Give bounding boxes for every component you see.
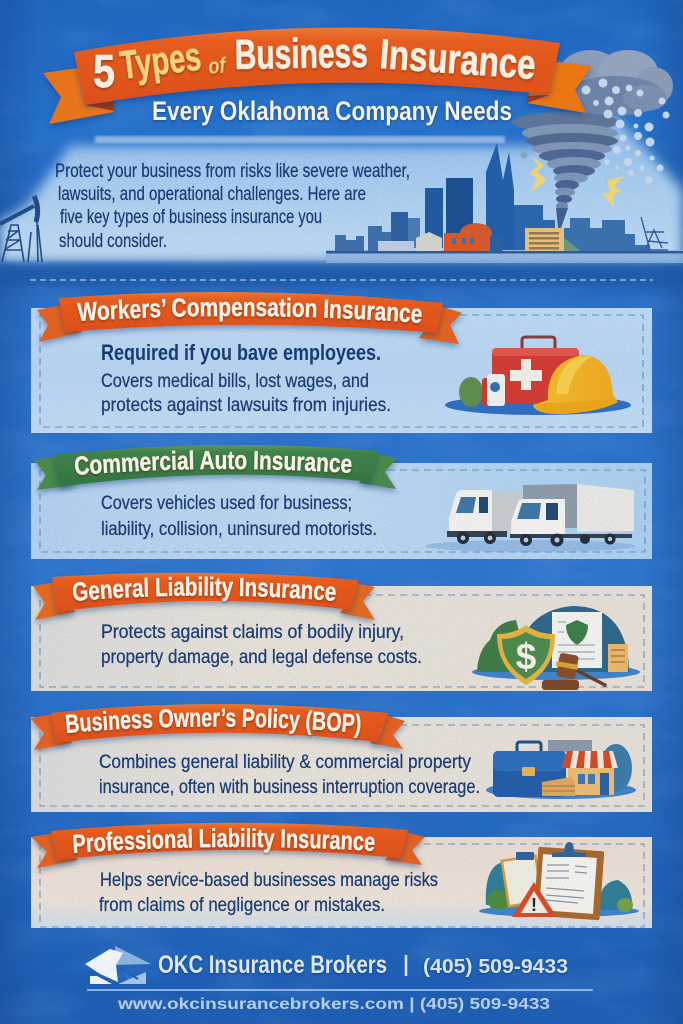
ribbon: commercial auto xyxy=(32,444,398,496)
panel: commercial auto xyxy=(31,444,652,559)
body text: Protects against claims of bodily injury, xyxy=(101,622,404,643)
main title: of xyxy=(207,52,229,79)
panel: intro with skyline xyxy=(0,110,683,285)
body text: insurance, often with business interruption coverage. xyxy=(99,777,480,798)
icon: shield, policy and gavel: $ xyxy=(516,636,537,677)
body text: Required if you bave employees. xyxy=(101,340,381,365)
body text: Combines general liability & commercial property xyxy=(99,752,471,773)
card xyxy=(31,586,652,691)
ribbon: professional liability: Professional Liability Insurance xyxy=(72,828,376,856)
body text xyxy=(99,870,438,916)
intro text: Protect your business from risks like severe weather, xyxy=(55,161,410,182)
icon: delivery trucks xyxy=(425,484,635,552)
ribbon: business owner's policy xyxy=(30,704,406,756)
footer xyxy=(85,946,593,1013)
tornado funnel xyxy=(512,112,618,228)
ribbon: professional liability xyxy=(31,822,426,874)
body text xyxy=(101,622,422,668)
hail xyxy=(520,78,670,184)
panel: business owner's policy xyxy=(30,704,652,812)
website and phone: www.okcinsurancebrokers.com | (405) 509-9433 xyxy=(117,996,550,1013)
ribbon: general liability xyxy=(32,572,376,626)
icon: lightning right xyxy=(602,176,625,207)
panel: workers compensation xyxy=(31,292,652,433)
banner tails xyxy=(43,62,592,124)
main title: Business xyxy=(234,29,368,78)
body text: Covers medical bills, lost wages, and xyxy=(101,371,369,392)
icon: briefcase and storefront xyxy=(486,740,636,799)
body text: protects against lawsuits from injuries. xyxy=(101,395,391,416)
intro text: five key types of business insurance you xyxy=(60,207,322,228)
storm cloud xyxy=(558,50,673,116)
body text: liability, collision, uninsured motorists. xyxy=(101,519,377,540)
body text xyxy=(101,340,391,416)
ribbon: workers compensation: Workers’ Compensation Insurance xyxy=(76,298,423,326)
card xyxy=(31,308,652,433)
body text xyxy=(99,752,480,798)
main title xyxy=(93,29,537,97)
body text: property damage, and legal defense costs. xyxy=(101,647,422,668)
icon: first aid kit and hard hat xyxy=(445,337,631,415)
card xyxy=(31,837,652,928)
card xyxy=(31,717,652,812)
banner body xyxy=(74,27,560,105)
panel: general liability xyxy=(31,572,652,691)
main title: 5 xyxy=(93,45,115,97)
body text: from claims of negligence or mistakes. xyxy=(99,895,385,916)
title banner xyxy=(43,27,592,126)
icon: shield, policy and gavel xyxy=(472,606,640,690)
body text: Covers vehicles used for business; xyxy=(101,493,352,514)
main title: Insurance xyxy=(378,30,537,88)
company name: OKC Insurance Brokers xyxy=(158,951,387,979)
ribbon: business owner's policy: Business Owner’s Policy (BOP) xyxy=(64,708,362,741)
subtitle: Every Oklahoma Company Needs xyxy=(152,96,512,126)
banner fold shadows xyxy=(85,95,549,111)
panel: professional liability xyxy=(31,822,652,928)
icon: crane tower xyxy=(641,217,668,250)
icon: clipboards and warning xyxy=(479,842,639,920)
ribbon: commercial auto: Commercial Auto Insurance xyxy=(74,450,353,478)
phone number: (405) 509-9433 xyxy=(423,956,568,978)
ribbon: general liability: General Liability Insurance xyxy=(72,576,337,604)
main title: Types xyxy=(118,34,203,88)
card xyxy=(31,463,652,559)
body text: Helps service-based businesses manage risks xyxy=(100,870,438,891)
icon: lightning left xyxy=(529,156,547,192)
illustration: city skyline xyxy=(326,143,683,263)
icon: oil derrick xyxy=(0,196,42,262)
company logo xyxy=(85,946,151,984)
intro text xyxy=(55,161,410,252)
intro text: should consider. xyxy=(59,231,167,252)
illustration: tornado and storm cloud xyxy=(512,50,673,228)
intro panel background xyxy=(0,110,683,285)
body text xyxy=(101,493,377,540)
icon: clipboards and warning: ! xyxy=(531,895,537,915)
ribbon: workers compensation xyxy=(36,292,464,350)
intro text: lawsuits, and operational challenges. Here are xyxy=(58,184,366,205)
